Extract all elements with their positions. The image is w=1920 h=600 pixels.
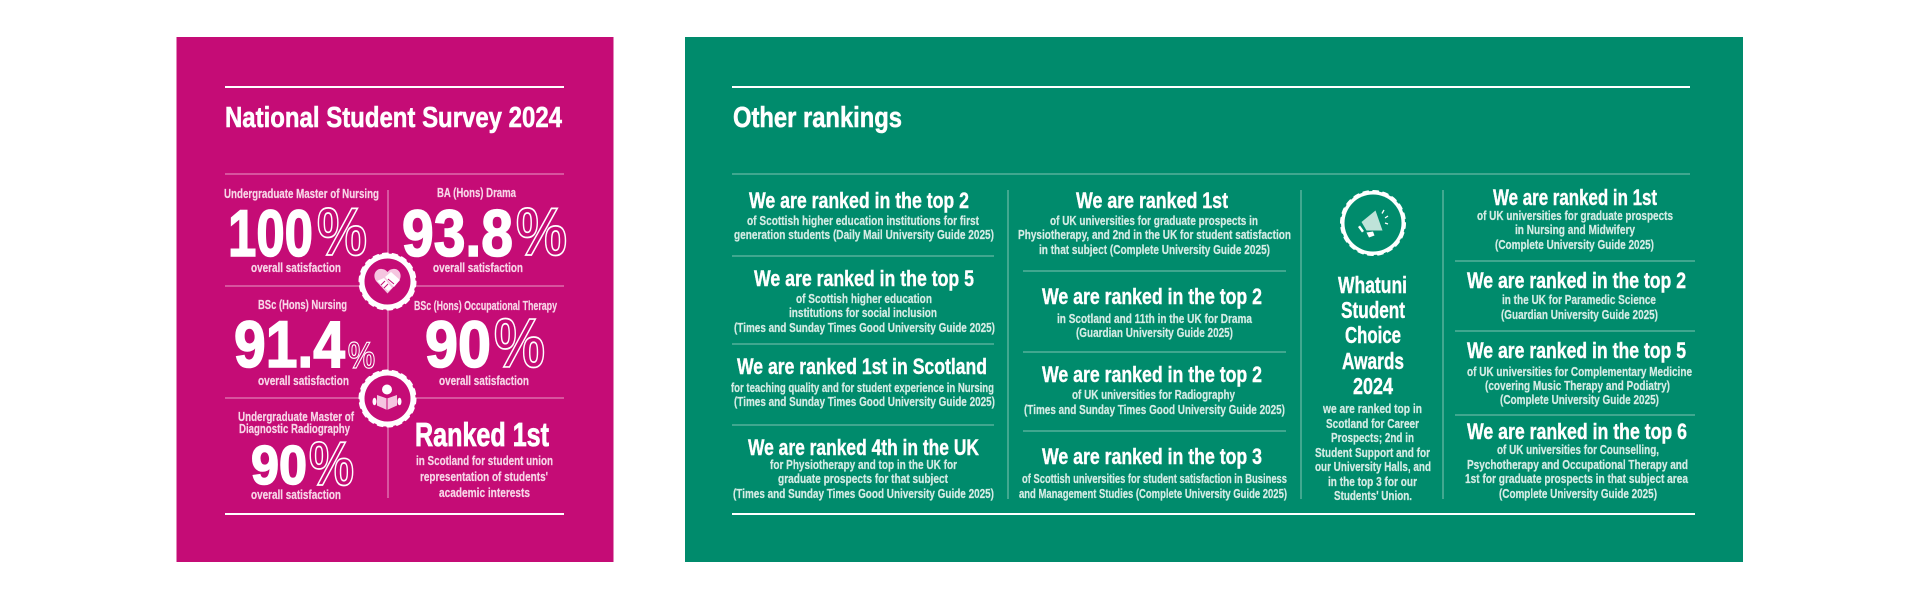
ranking: 4th in the UK Physiotherapy: (Times and Sunday Times Good University Guide 2025) — [733, 487, 994, 501]
stat: Undergraduate Master of Diagnostic Radiography 90%: Undergraduate Master of — [238, 410, 355, 424]
ranking: top 2 Drama: We are ranked in the top 2 — [1042, 284, 1262, 309]
ranking: 1st in Scotland Nursing: for teaching quality and for student experience in Nursing — [731, 381, 994, 395]
ranking: 1st in Scotland Nursing — [731, 354, 995, 409]
ranking: top 5 Complementary Medicine — [1467, 338, 1692, 407]
ranking: top 2 Drama — [1042, 284, 1262, 340]
ranking: top 2 Paramedic Science: We are ranked in the top 2 — [1467, 268, 1686, 293]
ranking: top 5 Scottish social inclusion: of Scottish higher education — [796, 292, 932, 306]
ranking: top 2 Paramedic Science: in the UK for Paramedic Science — [1502, 293, 1656, 307]
ranking: 1st Nursing and Midwifery: of UK universities for graduate prospects — [1477, 209, 1673, 223]
stat: Undergraduate Master of Diagnostic Radiography 90%: overall satisfaction — [251, 488, 341, 502]
ranking: 1st Physiotherapy graduate prospects: of UK universities for graduate prospects in — [1050, 214, 1258, 228]
ranking: top 3 Business and Management — [1019, 444, 1287, 501]
award: Whatuni Student Choice Awards 2024: Student — [1341, 297, 1405, 323]
stat: BSc (Hons) Occupational Therapy 90% — [414, 299, 557, 388]
ranking: 1st Nursing and Midwifery: in Nursing and Midwifery — [1515, 223, 1635, 237]
ranking: 4th in the UK Physiotherapy: for Physiotherapy and top in the UK for — [770, 458, 957, 472]
stat: Ranked 1st in Scotland: academic interests — [439, 486, 530, 500]
ranking: top 2 Drama: (Guardian University Guide 2025) — [1076, 326, 1233, 340]
stat: BSc (Hons) Occupational Therapy 90%: % — [494, 304, 545, 382]
heading: Other rankings: Other rankings — [733, 102, 902, 134]
ranking: top 2 Scottish first generation: generation students (Daily Mail University Guide 2025) — [734, 228, 994, 242]
ranking: top 2 Radiography: (Times and Sunday Times Good University Guide 2025) — [1024, 403, 1285, 417]
stat: BA (Hons) Drama 93.8%: % — [516, 194, 567, 270]
award: Whatuni Student Choice Awards 2024: Students' Union. — [1334, 489, 1412, 503]
panel: National Student Survey 2024 — [176, 37, 614, 562]
award: Whatuni Student Choice Awards 2024: Prospects; 2nd in — [1331, 431, 1414, 445]
stat: BA (Hons) Drama 93.8%: BA (Hons) Drama — [437, 186, 517, 200]
stat: BA (Hons) Drama 93.8% — [402, 186, 567, 275]
icon: reader with book badge — [360, 370, 416, 426]
heading: National Student Survey 2024: National Student Survey 2024 — [225, 102, 562, 134]
ranking: top 5 Scottish social inclusion: (Times and Sunday Times Good University Guide 2025) — [734, 321, 995, 335]
ranking: top 2 Drama: in Scotland and 11th in the UK for Drama — [1057, 312, 1253, 326]
ranking: top 2 Paramedic Science — [1467, 268, 1686, 322]
ranking: top 6 Counselling and Psychotherapy — [1465, 419, 1689, 501]
stat: Undergraduate Master of Nursing 100%: 100 — [228, 196, 313, 270]
ranking: 1st Nursing and Midwifery: (Complete University Guide 2025) — [1495, 238, 1654, 252]
icon: handshake heart badge — [360, 254, 416, 310]
ranking: 1st Physiotherapy graduate prospects: We are ranked 1st — [1076, 188, 1228, 213]
ranking: top 6 Counselling and Psychotherapy: 1st for graduate prospects in that subject area — [1465, 472, 1689, 486]
stat: Ranked 1st in Scotland: representation of students' — [420, 470, 548, 484]
ranking: top 3 Business and Management: and Management Studies (Complete University Guide 2025) — [1019, 487, 1287, 501]
stat: Ranked 1st in Scotland: Ranked 1st — [415, 417, 549, 454]
stat: Ranked 1st in Scotland: in Scotland for student union — [416, 454, 553, 468]
panel: Other rankings — [685, 37, 1743, 562]
ranking: top 3 Business and Management: of Scottish universities for student satisfaction in Business — [1022, 472, 1287, 486]
stat: Undergraduate Master of Nursing 100%: overall satisfaction — [251, 261, 341, 275]
stat: BSc (Hons) Nursing 91.4%: % — [348, 335, 375, 376]
stat: Undergraduate Master of Diagnostic Radiography 90%: % — [309, 430, 354, 499]
ranking: top 2 Radiography: of UK universities for Radiography — [1072, 388, 1235, 402]
ranking: top 5 Complementary Medicine: (covering Music Therapy and Podiatry) — [1485, 379, 1670, 393]
award: Whatuni Student Choice Awards 2024: Student Support and for — [1315, 446, 1430, 460]
award: Whatuni Student Choice Awards 2024: Scotland for Career — [1326, 417, 1419, 431]
ranking: 1st in Scotland Nursing: We are ranked 1st in Scotland — [737, 354, 987, 379]
stat: BSc (Hons) Nursing 91.4%: overall satisfaction — [258, 374, 349, 388]
ranking: 1st Physiotherapy graduate prospects: in that subject (Complete University Guide 2025) — [1039, 243, 1270, 257]
stat: BSc (Hons) Occupational Therapy 90%: overall satisfaction — [439, 374, 529, 388]
ranking: 4th in the UK Physiotherapy — [733, 435, 994, 501]
ranking: top 5 Complementary Medicine: of UK universities for Complementary Medicine — [1467, 365, 1692, 379]
ranking: 4th in the UK Physiotherapy: graduate prospects for that subject — [778, 472, 949, 486]
icon: megaphone badge — [1341, 191, 1405, 255]
ranking: top 5 Complementary Medicine: We are ranked in the top 5 — [1467, 338, 1686, 363]
award: Whatuni Student Choice Awards 2024: 2024 — [1353, 373, 1393, 399]
award: Whatuni Student Choice Awards 2024: Whatuni — [1338, 272, 1407, 298]
ranking: top 2 Radiography — [1024, 362, 1285, 417]
ranking: top 2 Radiography: We are ranked in the top 2 — [1042, 362, 1262, 387]
ranking: top 2 Scottish first generation — [734, 188, 994, 242]
award: Whatuni Student Choice Awards 2024: our University Halls, and — [1315, 460, 1431, 474]
stat: BSc (Hons) Occupational Therapy 90%: 90 — [425, 307, 491, 381]
ranking: top 6 Counselling and Psychotherapy: Psychotherapy and Occupational Therapy and — [1467, 458, 1688, 472]
ranking: top 6 Counselling and Psychotherapy: (Complete University Guide 2025) — [1499, 487, 1657, 501]
stat: Undergraduate Master of Nursing 100% — [224, 187, 379, 275]
stat: Undergraduate Master of Nursing 100%: Undergraduate Master of Nursing — [224, 187, 379, 201]
stat: BSc (Hons) Occupational Therapy 90%: BSc (Hons) Occupational Therapy — [414, 299, 557, 313]
award: Whatuni Student Choice Awards 2024: Awards — [1342, 348, 1404, 374]
ranking: top 6 Counselling and Psychotherapy: of UK universities for Counselling, — [1497, 443, 1659, 457]
ranking: 1st in Scotland Nursing: (Times and Sunday Times Good University Guide 2025) — [734, 395, 995, 409]
award: Whatuni Student Choice Awards 2024: we are ranked top in — [1322, 402, 1422, 416]
ranking: top 5 Scottish social inclusion: We are ranked in the top 5 — [754, 266, 974, 291]
stat: BSc (Hons) Nursing 91.4%: 91.4 — [234, 307, 345, 381]
ranking: top 5 Complementary Medicine: (Complete University Guide 2025) — [1500, 393, 1659, 407]
ranking: top 5 Scottish social inclusion: institutions for social inclusion — [789, 306, 937, 320]
ranking: 1st Nursing and Midwifery — [1477, 185, 1673, 252]
ranking: top 2 Paramedic Science: (Guardian University Guide 2025) — [1501, 308, 1658, 322]
ranking: 1st Nursing and Midwifery: We are ranked in 1st — [1493, 185, 1657, 210]
award: Whatuni Student Choice Awards 2024: in the top 3 for our — [1328, 475, 1417, 489]
ranking: 1st Physiotherapy graduate prospects — [1018, 188, 1291, 257]
stat: Undergraduate Master of Diagnostic Radiography 90%: 90 — [251, 434, 307, 496]
stat: Undergraduate Master of Nursing 100%: % — [317, 194, 367, 270]
award: Whatuni Student Choice Awards 2024 — [1315, 272, 1431, 503]
stat: Ranked 1st in Scotland — [415, 417, 553, 500]
ranking: top 3 Business and Management: We are ranked in the top 3 — [1042, 444, 1262, 469]
ranking: top 2 Scottish first generation: We are ranked in the top 2 — [749, 188, 969, 213]
stat: BA (Hons) Drama 93.8%: 93.8 — [402, 196, 513, 270]
ranking: 1st Physiotherapy graduate prospects: Physiotherapy, and 2nd in the UK for student satisfaction — [1018, 228, 1291, 242]
award: Whatuni Student Choice Awards 2024: Choice — [1345, 322, 1401, 348]
stat: BSc (Hons) Nursing 91.4%: BSc (Hons) Nursing — [258, 298, 347, 312]
ranking: top 2 Scottish first generation: of Scottish higher education institutions for first — [747, 214, 980, 228]
stat: Undergraduate Master of Diagnostic Radiography 90% — [238, 410, 355, 502]
ranking: top 5 Scottish social inclusion — [734, 266, 995, 335]
stat: BA (Hons) Drama 93.8%: overall satisfaction — [433, 261, 523, 275]
ranking: 4th in the UK Physiotherapy: We are ranked 4th in the UK — [748, 435, 980, 460]
stat: Undergraduate Master of Diagnostic Radiography 90%: Diagnostic Radiography — [239, 422, 350, 436]
ranking: top 6 Counselling and Psychotherapy: We are ranked in the top 6 — [1467, 419, 1687, 444]
